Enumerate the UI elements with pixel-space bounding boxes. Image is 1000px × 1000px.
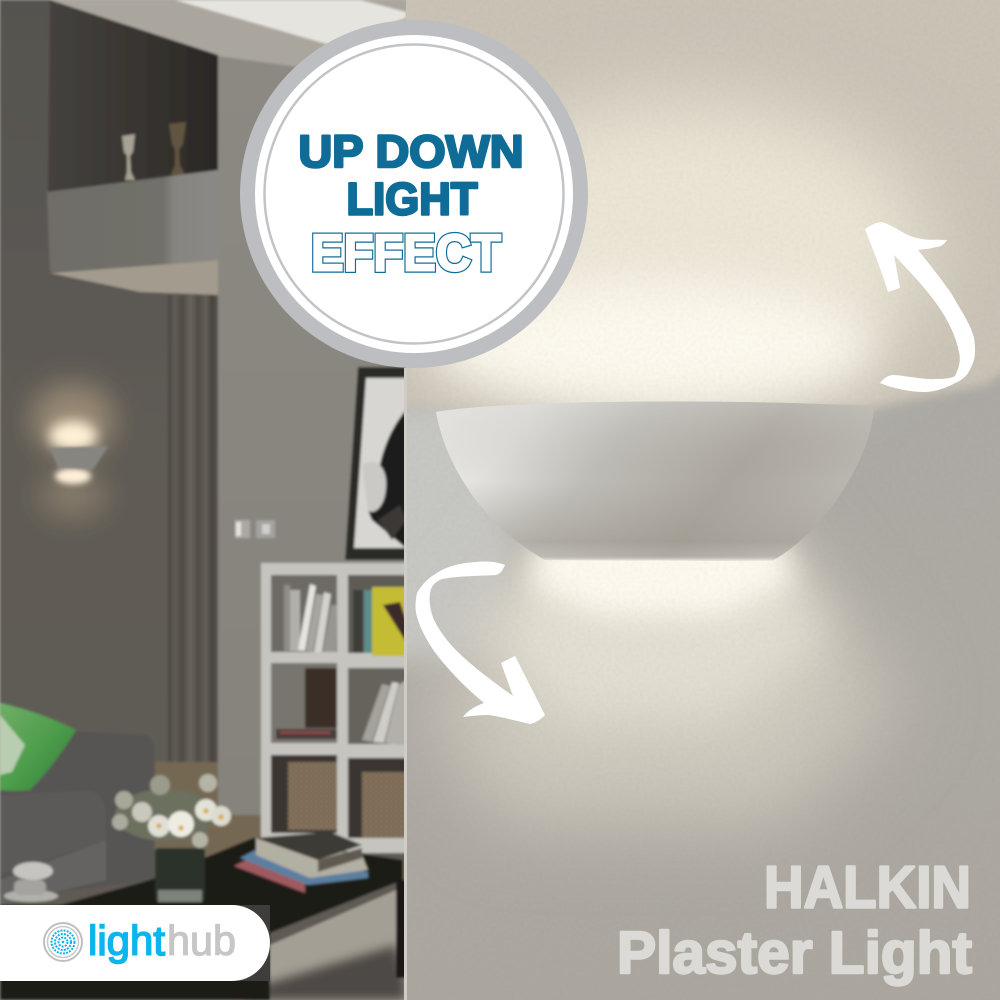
lower glow core — [530, 530, 795, 615]
product name — [617, 854, 972, 986]
badge heading: light: LIGHT — [346, 174, 478, 224]
books top right — [353, 587, 406, 656]
table leg — [396, 880, 406, 978]
small wall lamp — [50, 446, 108, 470]
room divider line — [404, 368, 407, 1000]
ceiling beam — [50, 0, 406, 70]
book display middle — [276, 668, 337, 739]
small wall glow lower — [39, 471, 107, 519]
badge — [240, 20, 588, 368]
product name: HALKIN — [764, 854, 971, 920]
wall base — [407, 385, 1000, 1000]
flower bouquet — [112, 774, 231, 848]
room right wall — [218, 50, 406, 820]
vase — [155, 848, 205, 902]
teacups — [4, 862, 58, 902]
upper glow core — [425, 283, 875, 407]
books top left — [284, 584, 337, 652]
floor — [155, 762, 406, 880]
framed picture — [345, 367, 406, 560]
small wall glow upper — [31, 384, 115, 456]
trophy right — [169, 122, 186, 175]
badge heading: up down: UP DOWN — [298, 126, 524, 177]
product type: Plaster Light — [617, 920, 972, 986]
wicker basket right — [362, 772, 406, 838]
shelf box — [47, 170, 218, 272]
green cushion — [0, 703, 76, 791]
coffee table — [0, 838, 403, 1000]
bookcase — [261, 563, 406, 853]
logo mark — [44, 923, 82, 961]
trophy left — [122, 134, 135, 180]
logo backing — [0, 905, 270, 981]
left wall tint — [380, 400, 510, 660]
lamp — [436, 401, 874, 561]
shelf underside — [50, 260, 218, 295]
wicker basket left — [288, 762, 337, 830]
arrow: up — [865, 222, 975, 392]
badge heading: effect outline: EFFECT — [311, 224, 501, 282]
books middle right — [362, 680, 406, 745]
curtain — [168, 295, 218, 765]
arrow: down — [416, 561, 545, 724]
book stack — [234, 832, 368, 893]
sofa base — [0, 840, 106, 905]
switch plate — [235, 520, 275, 538]
panel: room photo — [0, 0, 406, 1000]
badge heading: effect outline: EFFECT — [311, 224, 501, 282]
wall plaster texture — [406, 0, 1000, 1000]
panel: wall photo — [380, 0, 1000, 1000]
carpet shadow — [240, 945, 406, 1000]
dark niche — [48, 0, 218, 192]
lower glow wide — [425, 540, 900, 820]
ceiling highlight — [175, 0, 406, 45]
logo wordmark: hub: hub — [167, 917, 236, 964]
lower glow mid — [490, 540, 830, 720]
small lamp downlight — [55, 468, 91, 484]
logo pill — [0, 905, 270, 981]
logo wordmark: light: light — [88, 917, 165, 964]
small wall glow bright — [49, 421, 97, 451]
sofa seat — [0, 790, 106, 875]
upper wall wash — [380, 0, 1000, 408]
cushion highlight — [0, 715, 25, 775]
sofa back — [2, 733, 153, 887]
carpet — [268, 889, 404, 1000]
upper glow wide — [430, 100, 930, 400]
